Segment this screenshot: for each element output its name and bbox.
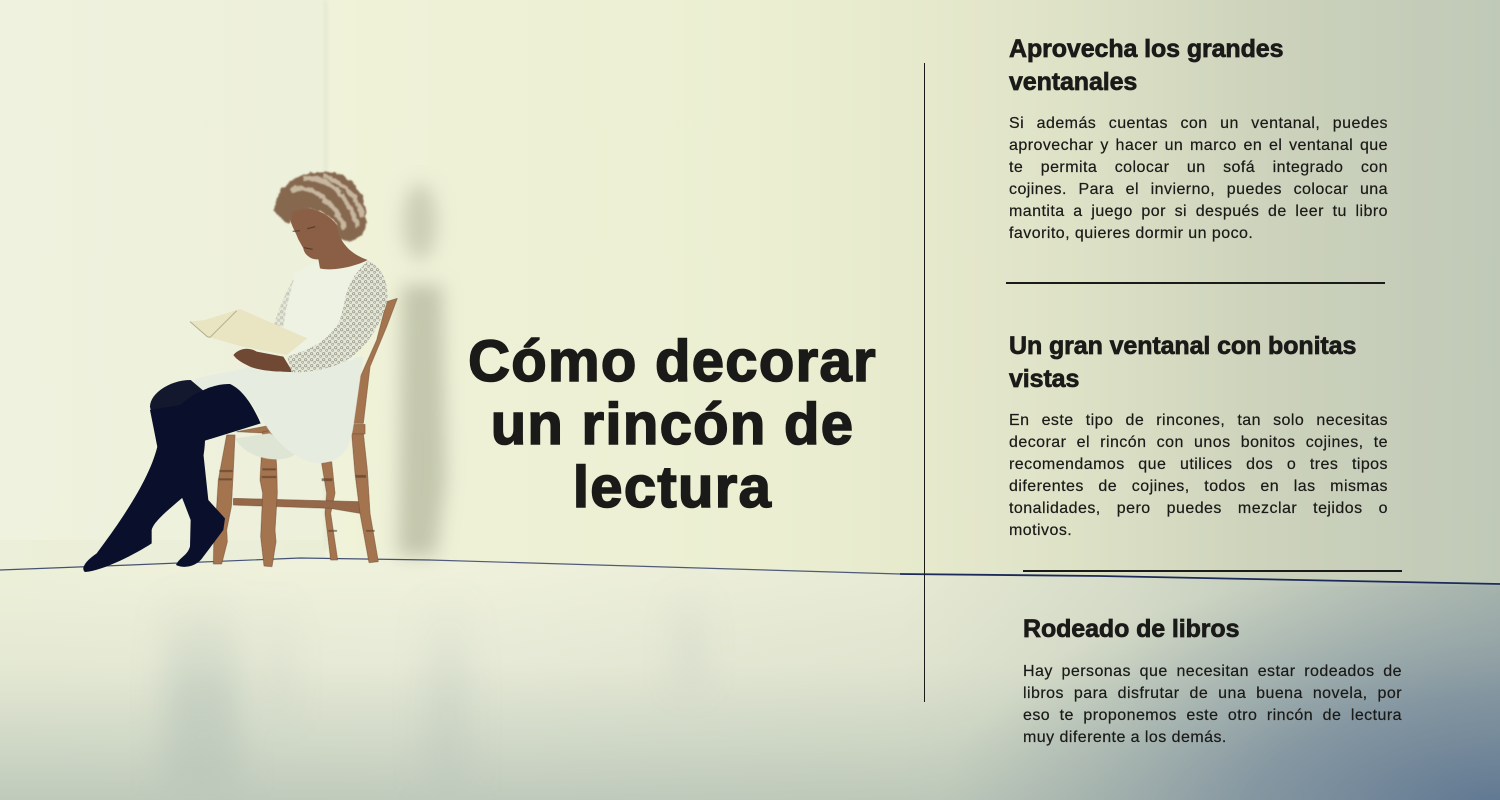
title: Cómo decorar xyxy=(468,329,877,394)
divider between second and third section xyxy=(1023,570,1402,572)
wooden chair xyxy=(213,298,397,567)
vertical divider xyxy=(924,63,925,702)
body text: mantita a juego por si después de leer tu libro xyxy=(1009,203,1388,220)
body text xyxy=(1023,663,1402,746)
neck and face xyxy=(290,207,368,269)
body text: eso te proponemos este otro rincón de lectura xyxy=(1023,707,1402,724)
black tights xyxy=(83,380,261,572)
title xyxy=(468,329,877,520)
divider between first and second section xyxy=(1006,282,1385,284)
body text: Hay personas que necesitan estar rodeados de xyxy=(1023,663,1402,680)
body text xyxy=(1009,412,1388,539)
section: Un gran ventanal con bonitas vistas xyxy=(1008,332,1388,539)
heading: ventanales xyxy=(1009,68,1137,96)
dress xyxy=(193,261,370,463)
floor reflections xyxy=(165,590,703,790)
body text: En este tipo de rincones, tan solo necesitas xyxy=(1009,412,1388,429)
section: Rodeado de libros xyxy=(1023,615,1402,746)
body text: favorito, quieres dormir un poco. xyxy=(1009,225,1253,242)
section: Aprovecha los grandes ventanales xyxy=(1008,35,1388,242)
title: un rincón de xyxy=(491,392,854,457)
body text: libros para disfrutar de una buena novela, por xyxy=(1023,685,1402,702)
heading: Rodeado de libros xyxy=(1023,615,1239,643)
body text: motivos. xyxy=(1009,522,1072,539)
body text: te permita colocar un sofá integrado con xyxy=(1009,159,1388,176)
heading xyxy=(1008,332,1356,393)
heading: vistas xyxy=(1009,365,1079,393)
body text: recomendamos que utilices dos o tres tipos xyxy=(1009,456,1388,473)
body text: diferentes de cojines, todos en las mismas xyxy=(1009,478,1388,495)
heading: Un gran ventanal con bonitas xyxy=(1009,332,1356,360)
heading: Aprovecha los grandes xyxy=(1009,35,1283,63)
body text: aprovechar y hacer un marco en el ventanal que xyxy=(1009,137,1388,154)
body text: cojines. Para el invierno, puedes colocar una xyxy=(1009,181,1388,198)
body text: decorar el rincón con unos bonitos cojines, te xyxy=(1009,434,1388,451)
body text xyxy=(1009,115,1388,242)
woman reading on a chair xyxy=(83,172,397,572)
body text: muy diferente a los demás. xyxy=(1023,729,1227,746)
horizon line xyxy=(0,558,1500,584)
open book xyxy=(190,309,307,355)
body text: tonalidades, pero puedes mezclar tejidos o xyxy=(1009,500,1388,517)
lace sleeve xyxy=(287,261,388,372)
title: lectura xyxy=(573,455,772,520)
hair xyxy=(275,172,367,241)
body text: Si además cuentas con un ventanal, puedes xyxy=(1009,115,1388,132)
hands xyxy=(233,349,293,372)
rear skirt xyxy=(235,433,297,459)
heading xyxy=(1008,35,1283,96)
chair leg rings xyxy=(219,468,375,532)
wall shadow of the woman xyxy=(398,184,446,556)
